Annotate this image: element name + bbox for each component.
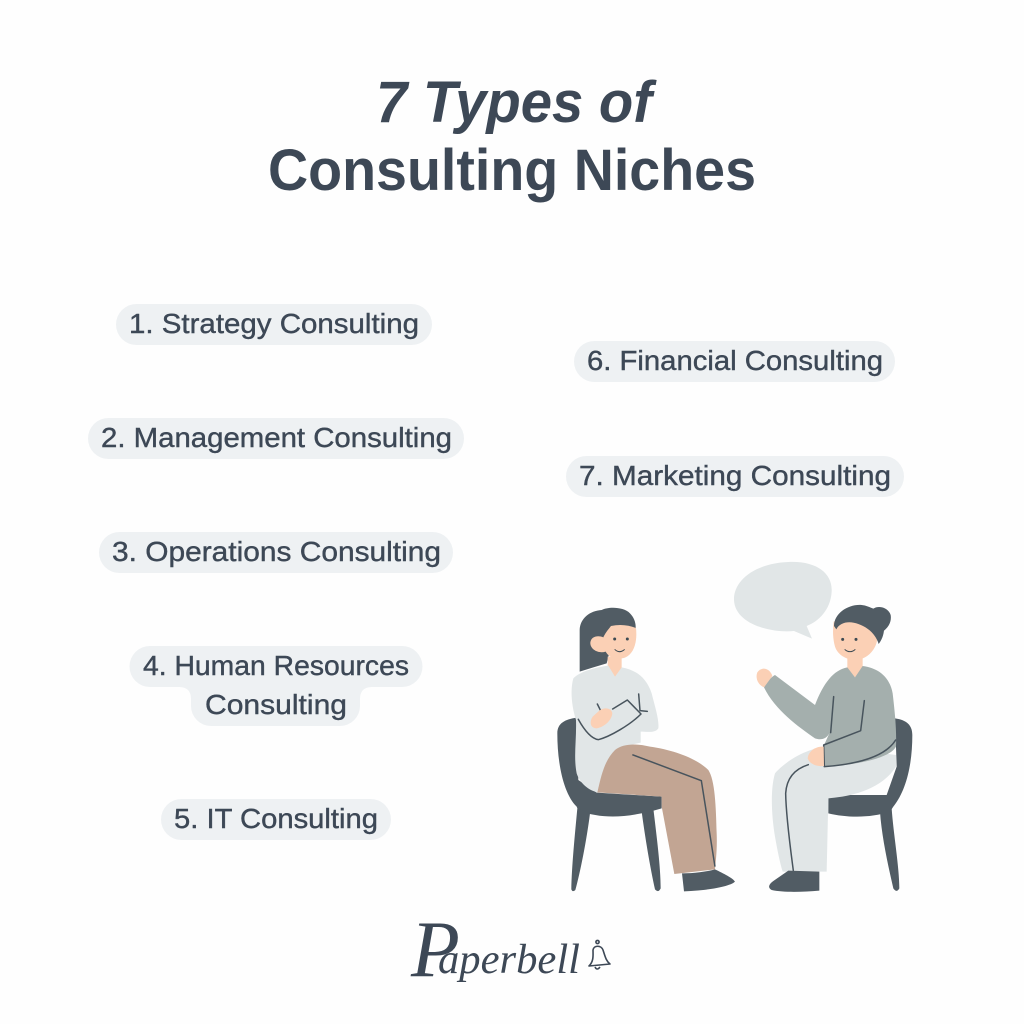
right chair: [828, 718, 912, 891]
icon: bell: [589, 940, 610, 969]
trousers: [772, 747, 896, 872]
item: 4. Human Resources Consulting: Consulting: [205, 689, 347, 720]
logo: Paperbell: aperbell: [438, 937, 580, 983]
eyes and smile: [613, 637, 616, 640]
logo: Paperbell: P: [410, 906, 460, 994]
shoe: [769, 871, 819, 892]
illustration: two people in consultation: [557, 562, 912, 892]
left chair: [557, 718, 662, 891]
hair: [580, 608, 636, 672]
shirt: [572, 666, 658, 792]
title: Consulting Niches: [268, 138, 756, 203]
item: 5. IT Consulting: [161, 799, 391, 840]
sweater lines: [824, 697, 896, 767]
logo: Paperbell: [410, 906, 610, 994]
trouser crease: [632, 755, 715, 867]
item: 4. Human Resources Consulting: 4. Human Resources: [143, 650, 409, 681]
trousers: [597, 744, 717, 874]
item: 6. Financial Consulting: 6. Financial Consulting: [587, 345, 883, 376]
item: 7. Marketing Consulting: [566, 456, 904, 497]
trouser crease: [786, 765, 808, 871]
face: [833, 620, 877, 660]
item: 1. Strategy Consulting: 1. Strategy Consulting: [129, 308, 419, 339]
item: 3. Operations Consulting: [99, 532, 453, 573]
hand: [591, 708, 612, 728]
left hand: [757, 669, 772, 687]
left person: [572, 608, 735, 891]
hair and bun: [834, 605, 891, 644]
neck: [847, 657, 863, 677]
item: 7. Marketing Consulting: 7. Marketing Consulting: [579, 460, 891, 491]
title: 7 Types of: [376, 70, 657, 135]
item: 3. Operations Consulting: 3. Operations Consulting: [112, 536, 441, 567]
face and ear: [590, 625, 636, 659]
eyes and smile: [841, 638, 844, 641]
right hand: [808, 747, 824, 766]
item: 1. Strategy Consulting: [116, 304, 432, 345]
item: 5. IT Consulting: 5. IT Consulting: [174, 803, 378, 834]
item: 4. Human Resources Consulting: [130, 646, 422, 726]
item: 2. Management Consulting: [88, 418, 464, 459]
arm outline and clipboard: [578, 694, 647, 740]
speech bubble: [734, 562, 832, 639]
shoe: [682, 869, 735, 891]
item: 6. Financial Consulting: [574, 341, 895, 382]
sweater: [764, 666, 896, 767]
item: 2. Management Consulting: 2. Management Consulting: [101, 422, 452, 453]
neck: [608, 657, 622, 677]
title: [268, 70, 756, 203]
right person: [757, 605, 896, 892]
